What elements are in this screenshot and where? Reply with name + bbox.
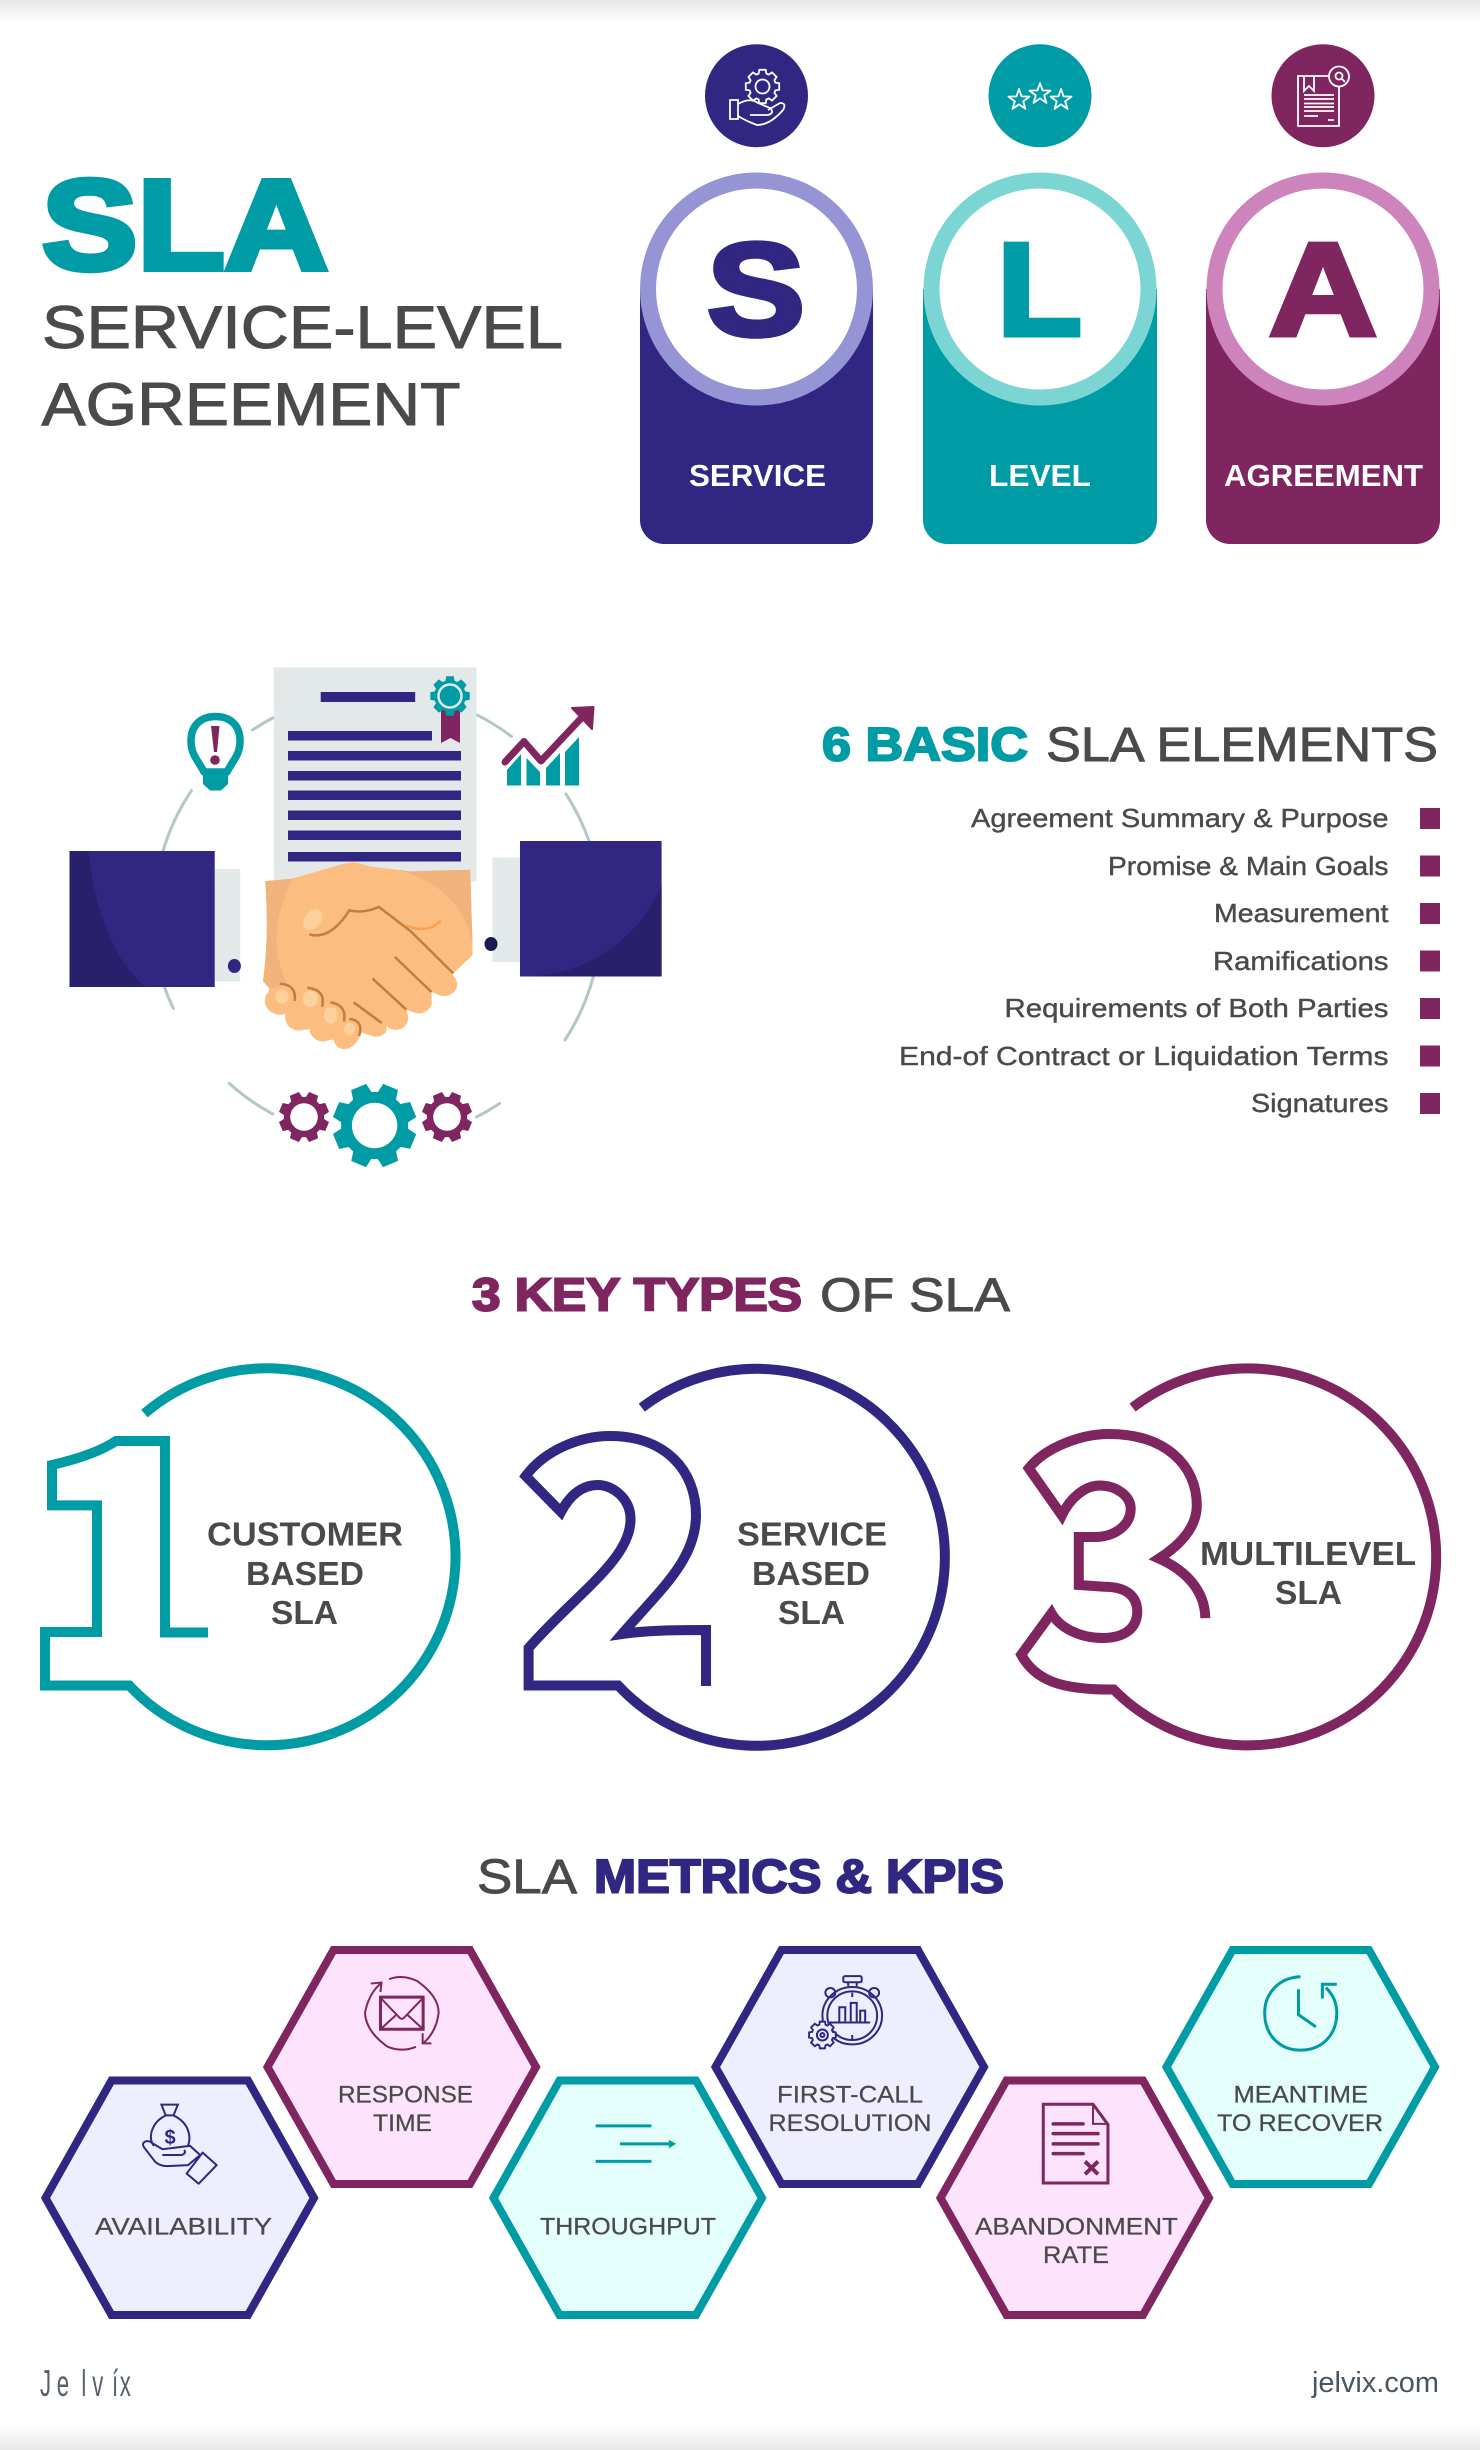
list: SLA elements: Promise & Main Goals <box>1108 851 1388 881</box>
heading: 3 key types <box>472 1268 1011 1321</box>
list: SLA elements: End-of Contract or Liquidation Terms <box>899 1041 1388 1071</box>
hexagon: first-call resolution: FIRST-CALL <box>777 2082 923 2108</box>
right sleeve and cuff <box>484 841 662 976</box>
logo: Jelvix: Jelvíx <box>40 2363 131 2404</box>
icon: flow arrow lines <box>596 2126 676 2161</box>
footer url: jelvix.com <box>1311 2367 1439 2399</box>
heading: 6 basic SLA elements <box>822 718 1438 772</box>
type 2: service based: SLA <box>778 1594 845 1631</box>
hexagon: meantime to recover: MEANTIME <box>1234 2082 1368 2108</box>
type 2: service based: SERVICE <box>737 1516 887 1552</box>
icon: document with magnifier <box>1272 44 1374 147</box>
hexagon: availability <box>46 2080 314 2315</box>
list bullets <box>1420 808 1440 1114</box>
list: SLA elements: Agreement Summary & Purpose <box>971 803 1388 833</box>
type 1: customer based: BASED <box>246 1555 364 1592</box>
hexagon: response time: RESPONSE <box>338 2082 473 2108</box>
type 1: customer based: SLA <box>271 1594 338 1631</box>
icon: envelope with arrows <box>365 1977 439 2050</box>
title <box>42 154 563 438</box>
hexagon: meantime to recover: TO RECOVER <box>1217 2110 1383 2137</box>
panel: S service card: S <box>707 216 805 363</box>
icon: money bag in hand <box>143 2105 217 2184</box>
icon: clock with return arrow <box>1265 1977 1337 2050</box>
title: SERVICE-LEVEL <box>42 294 563 361</box>
heading: SLA metrics and KPIs: SLA <box>477 1851 577 1904</box>
panel: L level card: LEVEL <box>989 458 1091 493</box>
hexagon: response time: TIME <box>373 2110 432 2137</box>
left sleeve and cuff <box>70 851 241 987</box>
panel: A agreement card: AGREEMENT <box>1224 458 1423 493</box>
type 2: service based: BASED <box>752 1555 870 1592</box>
hexagon: first-call resolution <box>716 1950 984 2184</box>
icon: hand with gear <box>705 44 808 147</box>
heading: 6 basic SLA elements: SLA ELEMENTS <box>1046 719 1438 772</box>
type 1: customer based: CUSTOMER <box>207 1516 403 1552</box>
ring arcs <box>163 715 594 1117</box>
hexagon: availability: AVAILABILITY <box>95 2214 272 2240</box>
list: SLA elements: Requirements of Both Parties <box>1004 993 1388 1023</box>
illustration: handshake and contract <box>70 668 662 1180</box>
title: AGREEMENT <box>42 371 460 438</box>
icon: growth chart <box>505 707 594 786</box>
handshake <box>263 863 473 1052</box>
list: SLA elements: Measurement <box>1214 898 1389 928</box>
hexagon: abandonment rate: ABANDONMENT <box>975 2214 1178 2240</box>
list: SLA elements <box>899 803 1389 1118</box>
panel: S service card <box>640 180 873 544</box>
heading: SLA metrics and KPIs: METRICS & KPIS <box>594 1850 1004 1902</box>
list: SLA elements: Signatures <box>1251 1088 1388 1118</box>
hexagon: response time <box>268 1950 536 2184</box>
icon: gears <box>271 1071 480 1180</box>
heading: 3 key types: OF SLA <box>820 1268 1011 1321</box>
type 2: service based <box>526 1369 945 1746</box>
hexagon: meantime to recover <box>1166 1950 1435 2184</box>
heading: 3 key types: 3 KEY TYPES <box>472 1268 802 1320</box>
list: SLA elements: Ramifications <box>1213 946 1388 976</box>
hexagon: first-call resolution: RESOLUTION <box>768 2110 932 2137</box>
hexagon: availability: $ <box>164 2127 176 2149</box>
title: SLA <box>42 154 328 297</box>
type 3: multilevel: MULTILEVEL <box>1200 1535 1416 1572</box>
panel: L level card: L <box>997 216 1082 363</box>
hexagon: abandonment rate: RATE <box>1043 2242 1109 2269</box>
hexagon: throughput: THROUGHPUT <box>540 2214 716 2240</box>
type 3: multilevel <box>1021 1368 1436 1745</box>
panel: L level card <box>923 180 1157 544</box>
icon: rejected document <box>1043 2104 1108 2183</box>
type 1: customer based <box>45 1368 456 1745</box>
icon: stopwatch with gear <box>809 1976 882 2048</box>
heading: 6 basic SLA elements: 6 BASIC <box>822 718 1028 770</box>
panel: A agreement card <box>1206 180 1440 544</box>
hexagon: abandonment rate <box>940 2080 1209 2315</box>
icon: three stars <box>988 44 1092 147</box>
panel: A agreement card: A <box>1269 216 1377 363</box>
panel: S service card: SERVICE <box>689 458 826 493</box>
hexagon: throughput <box>494 2080 762 2315</box>
type 3: multilevel: SLA <box>1275 1574 1342 1611</box>
contract document <box>274 668 476 882</box>
icon: light bulb <box>191 716 240 790</box>
